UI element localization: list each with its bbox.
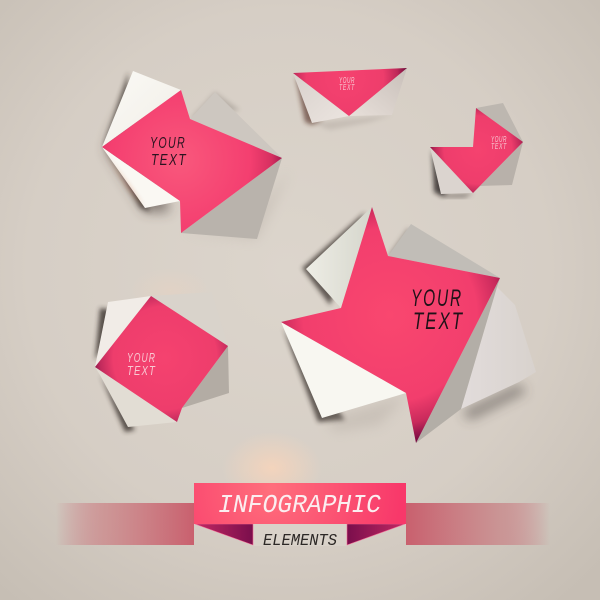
folded square shape, lower left <box>95 292 229 432</box>
ribbon fold: right <box>347 524 405 545</box>
flap: right light <box>461 287 536 409</box>
fold: upper grey <box>476 103 523 142</box>
text: your text: TEXT <box>151 152 187 169</box>
text: your text <box>150 135 187 169</box>
subtitle: ELEMENTS <box>263 532 337 551</box>
fold: lower left <box>430 147 473 194</box>
fold: lower white <box>102 147 180 208</box>
folded arrow shape, top left <box>102 71 290 239</box>
folded arrow shape, top right <box>430 103 523 198</box>
fold: right <box>349 68 407 116</box>
fold: lower grey <box>473 142 523 193</box>
fold: upper white <box>95 296 151 367</box>
band: right <box>406 503 550 545</box>
title: INFOGRAPHIC <box>218 490 381 520</box>
text: your text: YOUR <box>339 76 355 85</box>
band: left <box>56 503 194 545</box>
pink square <box>95 296 228 422</box>
text: your text: TEXT <box>413 308 464 335</box>
folded envelope shape, top centre <box>293 68 407 130</box>
subtitle panel <box>253 524 347 546</box>
text: your text: TEXT <box>127 363 156 378</box>
fold: right grey <box>416 278 500 443</box>
pink star <box>281 207 500 443</box>
fold: lower grey <box>181 158 282 239</box>
text: your text: YOUR <box>150 135 186 152</box>
title banner <box>56 483 550 551</box>
fold: lower <box>95 367 177 427</box>
text: your text <box>411 285 464 335</box>
text: your text <box>339 76 355 92</box>
fold: right grey <box>182 346 229 408</box>
fold: lower left white <box>281 322 406 418</box>
folded star shape, large <box>281 207 536 443</box>
fold: upper faint grey <box>151 292 228 346</box>
fold: upper grey <box>190 92 282 158</box>
fold: upper left <box>306 207 372 308</box>
fold: left <box>293 73 349 123</box>
text: your text: YOUR <box>411 285 463 312</box>
ribbon <box>194 483 406 524</box>
ribbon fold: left <box>195 524 253 545</box>
text: your text <box>491 135 507 151</box>
text: your text: YOUR <box>491 135 507 144</box>
text: your text <box>127 350 156 378</box>
text: your text: TEXT <box>491 142 507 151</box>
fold: upper grey <box>388 224 500 278</box>
text: your text: TEXT <box>339 83 355 92</box>
pink triangle <box>293 68 407 116</box>
text: your text: YOUR <box>127 350 156 365</box>
fold: upper white <box>102 71 181 147</box>
pink arrow <box>102 90 282 233</box>
pink arrow <box>430 108 523 193</box>
